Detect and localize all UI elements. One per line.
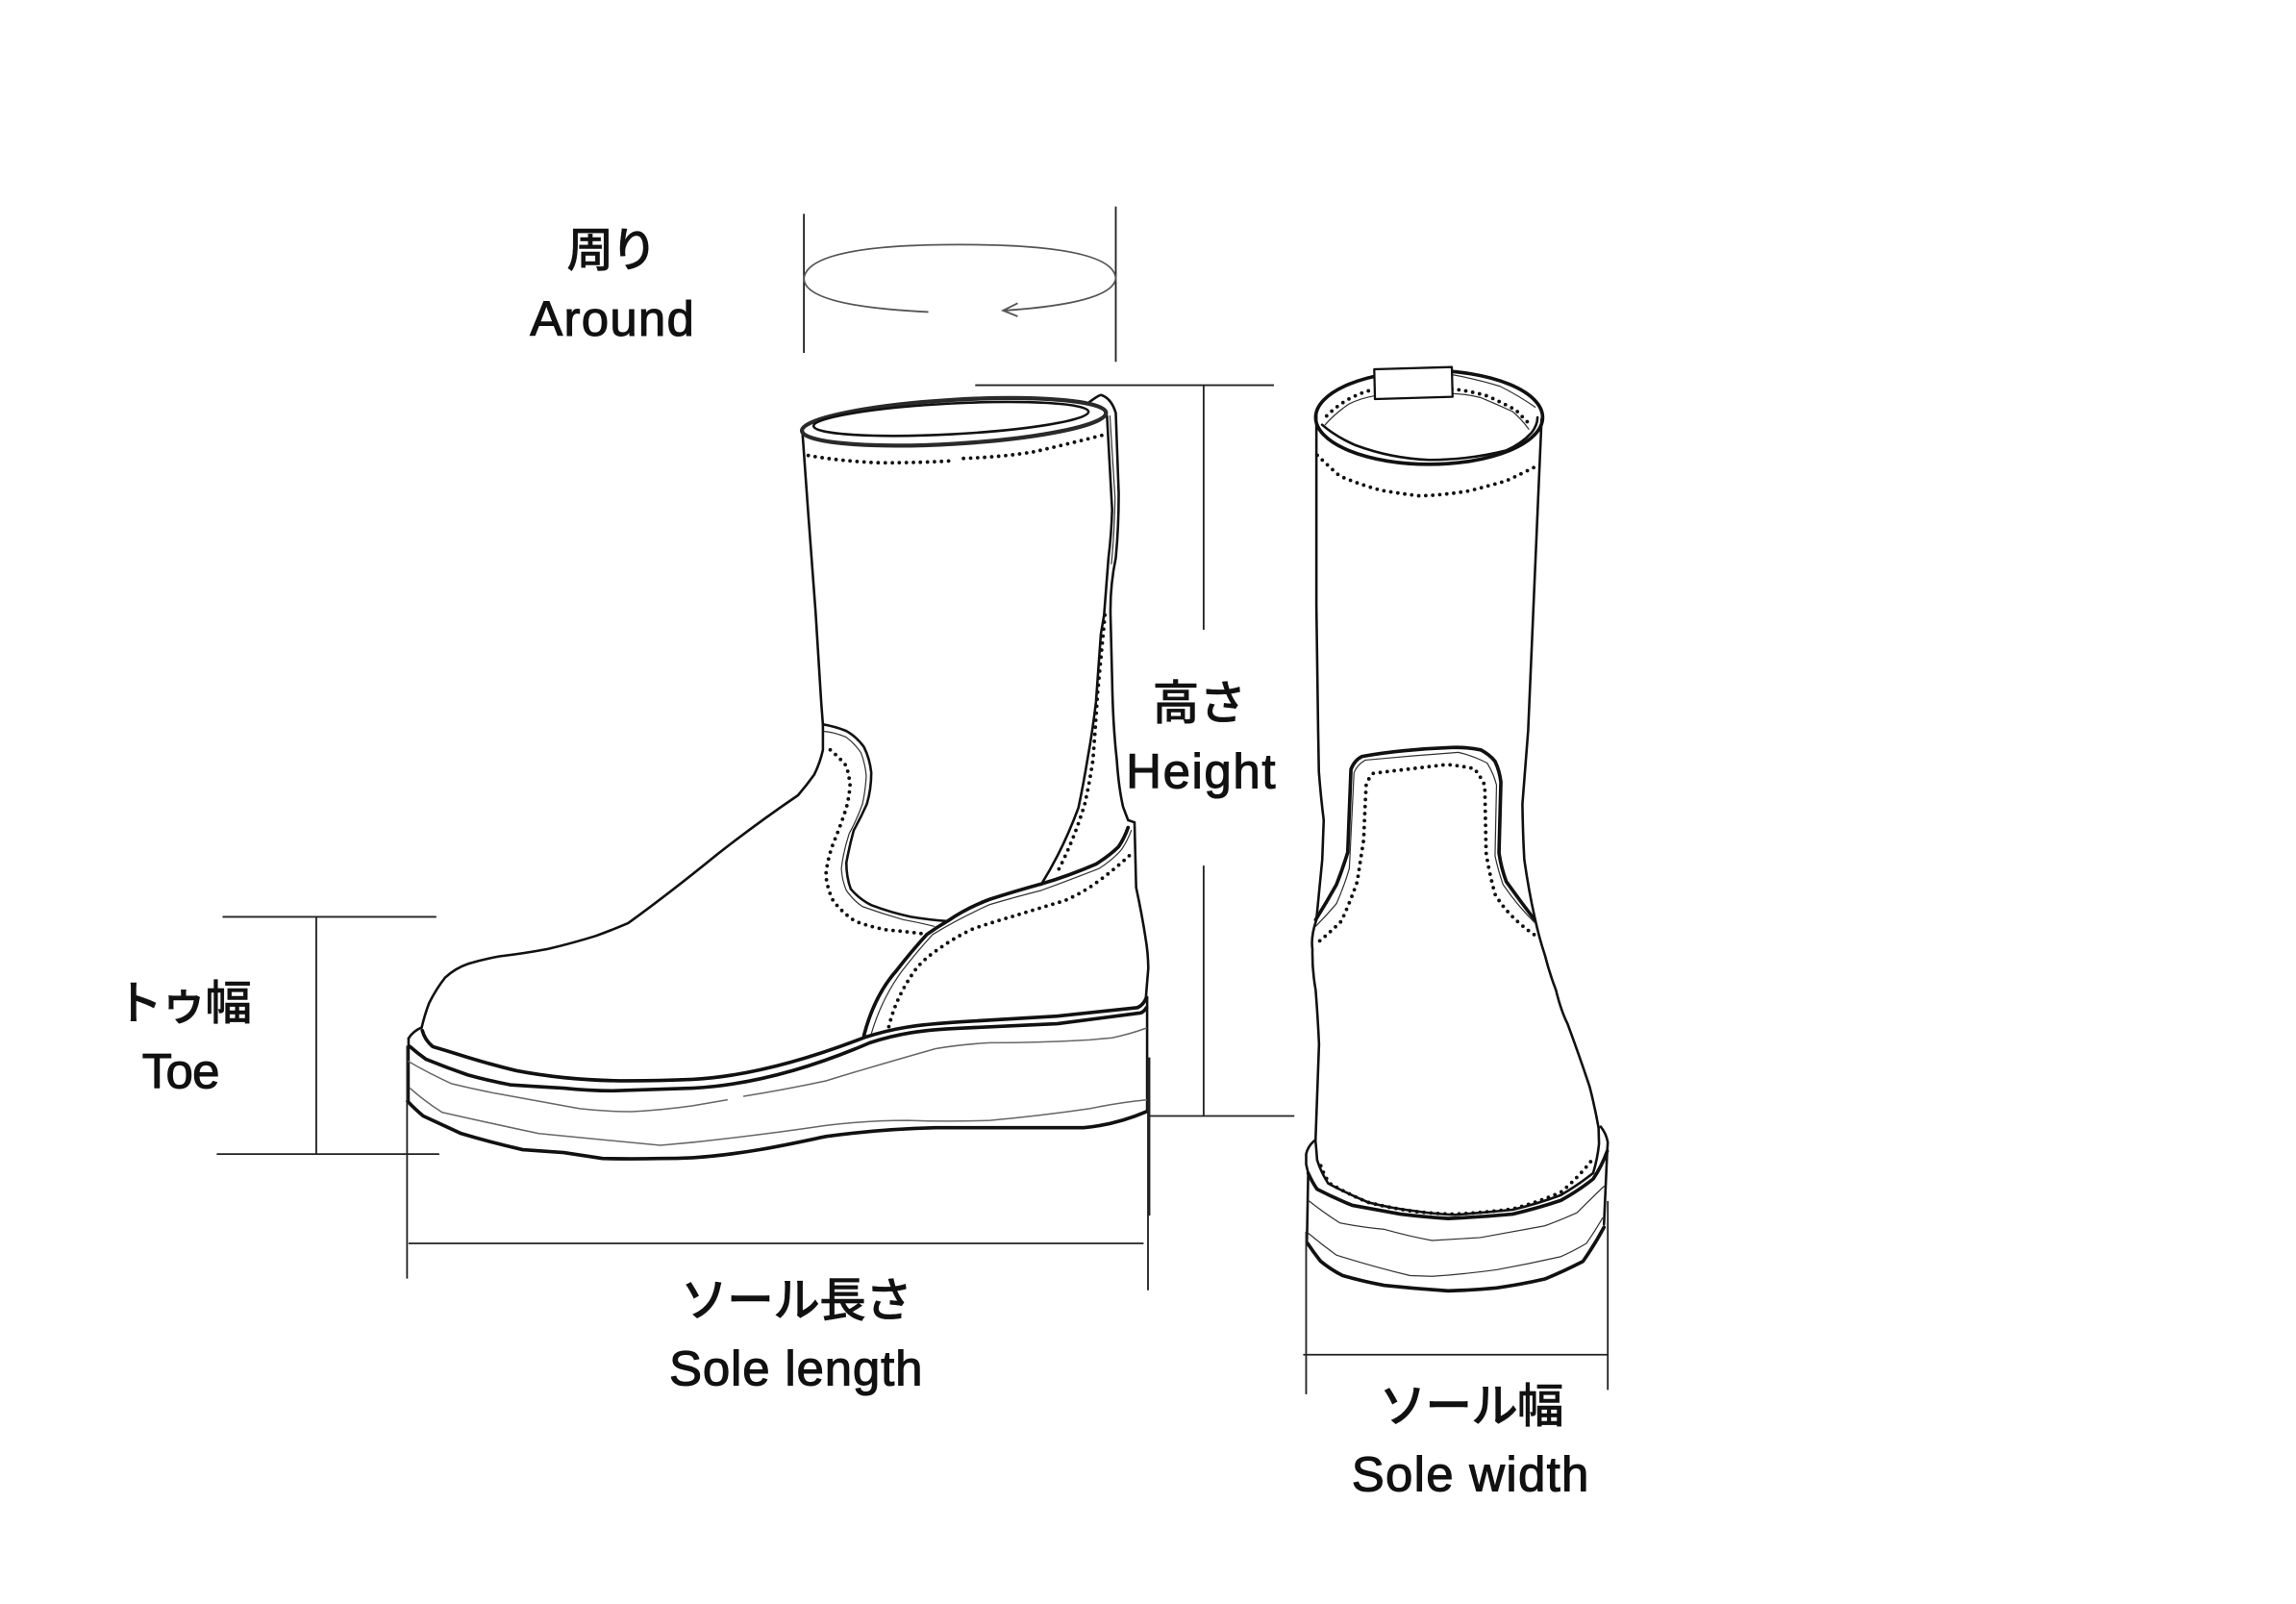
back seam thin line (1110, 416, 1115, 564)
heel counter (864, 827, 1128, 1036)
heel counter stitching (888, 852, 1133, 1027)
sole sides (1306, 1140, 1314, 1243)
welt lower edge (1309, 1151, 1608, 1218)
label: height: 高さ (1153, 678, 1246, 730)
sole top edge (422, 997, 1146, 1081)
front view boot (1306, 367, 1608, 1291)
sole bottom edge (408, 1101, 1146, 1159)
front panel stitching (1320, 764, 1535, 940)
label: sole width: Sole width (1352, 1446, 1588, 1501)
label: sole width: ソール幅 (1380, 1381, 1564, 1433)
welt lower edge (410, 1008, 1146, 1090)
measure: height (975, 386, 1294, 1116)
height guide lines (975, 386, 1294, 1116)
back seam stitching (1056, 615, 1105, 875)
collar stitching front (1317, 455, 1537, 496)
around rotation arrow (804, 244, 1115, 316)
collar inner back edge (1325, 393, 1529, 429)
collar rim outer (801, 390, 1108, 453)
welt outer corner (409, 1027, 422, 1039)
back seam (1041, 416, 1112, 885)
pull tab (1374, 367, 1453, 399)
sole layer line lower (1309, 1218, 1603, 1276)
sole bottom (1308, 1227, 1604, 1291)
collar outer (1315, 370, 1542, 464)
collar rim inner (812, 396, 1089, 441)
sole layer line lower (410, 1089, 1146, 1145)
sole width guide lines (1303, 1201, 1608, 1394)
side view boot (408, 390, 1148, 1159)
sole sides (408, 1039, 410, 1101)
side panel stitching (826, 750, 921, 934)
label: toe: Toe (142, 1044, 219, 1099)
label: around (530, 225, 694, 346)
label: sole length: ソール長さ (681, 1275, 912, 1327)
vamp bottom edge (1317, 1128, 1599, 1215)
label: height (1126, 678, 1275, 798)
label: toe (115, 978, 252, 1099)
label: sole length (669, 1275, 922, 1396)
sole layer line upper (1309, 1187, 1604, 1241)
collar inner front edge (1322, 417, 1537, 460)
collar stitching back (1327, 390, 1370, 416)
label: sole length: Sole length (669, 1341, 922, 1396)
sole layer line upper (408, 1061, 727, 1112)
back of shaft (1089, 395, 1135, 822)
sole length guide lines (407, 1045, 1150, 1291)
measure: sole width (1303, 1201, 1608, 1501)
measure: around (530, 207, 1115, 362)
label: height: Height (1126, 743, 1275, 798)
front panel notch (1315, 747, 1535, 919)
toe guide lines (216, 916, 439, 1154)
shaft right (1522, 419, 1599, 1128)
label: sole width (1352, 1381, 1588, 1501)
label: around: 周り (566, 225, 658, 277)
shaft left (1312, 414, 1324, 1160)
side panel notch (823, 724, 947, 921)
measure: toe (115, 916, 439, 1154)
label: around: Around (530, 291, 694, 346)
label: toe: トゥ幅 (115, 978, 252, 1030)
toe stitching (1321, 1159, 1593, 1215)
shaft and vamp outline (422, 432, 823, 1027)
collar stitching (809, 456, 955, 463)
around guide lines (804, 207, 1115, 362)
measure: sole length (407, 1045, 1150, 1396)
collar back double line (1454, 375, 1535, 407)
heel counter back edge (1135, 823, 1148, 1000)
